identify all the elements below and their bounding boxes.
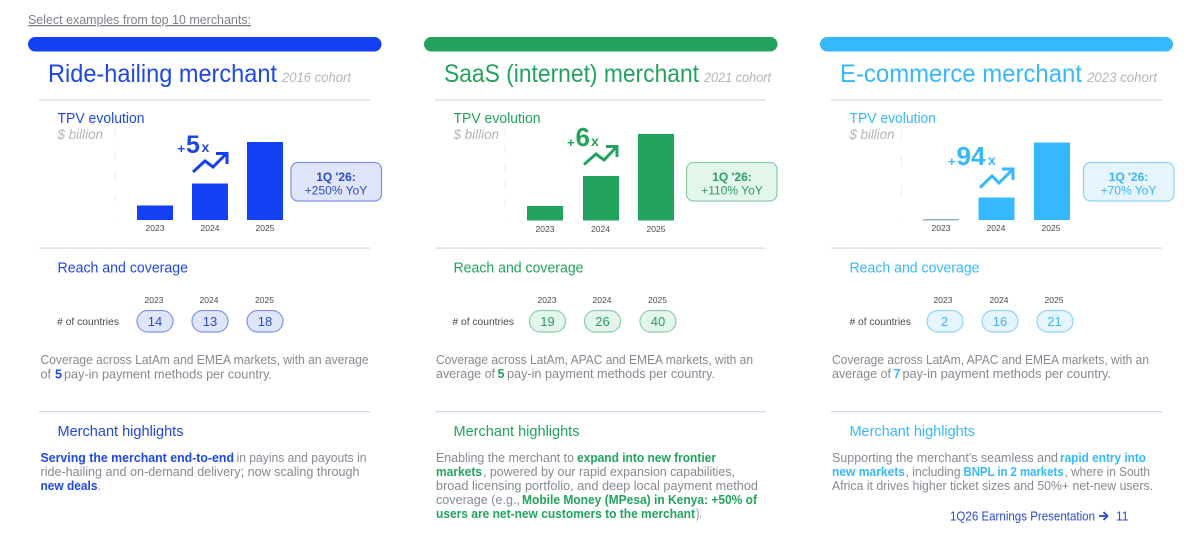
callout: 1Q 26 growth	[291, 162, 382, 201]
growth multiple: +94x: 94	[956, 141, 986, 171]
text: coverage description	[832, 353, 1149, 381]
text: coverage description: 5	[498, 367, 504, 381]
callout: 1Q 26 growth: 1Q '26:	[712, 170, 752, 184]
text: highlights: , where in South	[1064, 465, 1150, 479]
panel: e-commerce merchant	[820, 37, 1174, 493]
text: highlights: broad licensing portfolio, and deep local payment method	[436, 479, 758, 493]
heading: TPV evolution: TPV evolution	[454, 111, 540, 127]
bar chart: TPV	[900, 129, 1070, 233]
panel title: Ride-hailing merchant	[48, 60, 277, 88]
heading: reach and coverage: Reach and coverage	[850, 260, 980, 276]
table: number of countries: 2024	[593, 295, 612, 305]
growth multiple: +5x: 5	[186, 131, 200, 159]
table: number of countries: 21	[1047, 314, 1062, 329]
callout: 1Q 26 growth	[686, 162, 777, 201]
callout: 1Q 26 growth: 1Q '26:	[1109, 170, 1148, 184]
panel title: 2016 cohort	[281, 69, 352, 85]
heading: reach and coverage: Reach and coverage	[58, 260, 188, 276]
growth multiple: +94x: +	[948, 154, 956, 169]
table: number of countries: # of countries	[57, 316, 119, 328]
table: number of countries: 2025	[648, 295, 667, 305]
growth multiple: +94x: x	[988, 152, 996, 168]
text: highlights: Mobile Money (MPesa) in Kenya: +50% of	[522, 493, 758, 507]
text: highlights: Supporting the merchant's seamless and	[832, 451, 1058, 465]
panel title: 2023 cohort	[1086, 69, 1158, 85]
text: highlights: ).	[696, 507, 702, 521]
text: coverage description: average of	[436, 367, 496, 381]
table: number of countries: 16	[993, 314, 1007, 329]
table: number of countries: 13	[203, 314, 217, 329]
callout: 1Q 26 growth: +110% YoY	[701, 184, 763, 198]
icon: trend arrow	[980, 169, 1013, 188]
table: number of countries	[452, 295, 676, 332]
growth multiple: +6x: 6	[576, 122, 590, 152]
bar chart: TPV: 2024	[591, 224, 610, 234]
callout: 1Q 26 growth: +70% YoY	[1101, 184, 1156, 198]
table: number of countries: # of countries	[850, 316, 911, 328]
bar chart: TPV: 2024	[987, 223, 1006, 233]
text: highlights: in payins and payouts in	[236, 451, 367, 465]
heading: TPV evolution: $ billion	[453, 126, 499, 142]
growth multiple: +5x: +	[178, 141, 186, 156]
text: highlights: coverage (e.g.,	[436, 493, 520, 507]
table: number of countries: 2023	[145, 295, 164, 305]
text: coverage description: 5	[55, 368, 62, 382]
table: number of countries	[57, 295, 283, 332]
heading: merchant highlights: Merchant highlights	[454, 424, 580, 440]
text: coverage description: pay-in payment methods per country.	[64, 368, 272, 382]
text: coverage description: Coverage across LatAm, APAC and EMEA markets, with an	[436, 353, 753, 367]
panel title: 2021 cohort	[703, 69, 772, 85]
text: coverage description: pay-in payment methods per country.	[902, 367, 1111, 381]
heading: merchant highlights: Merchant highlights	[58, 424, 184, 440]
growth multiple: +6x: +	[567, 135, 575, 150]
heading: TPV evolution: $ billion	[57, 126, 103, 142]
heading: TPV evolution: TPV evolution	[850, 111, 936, 127]
heading: select examples: Select examples from top 10 merchants:	[28, 12, 251, 27]
heading: TPV evolution: TPV evolution	[58, 111, 144, 127]
bar chart: TPV: 2023	[932, 223, 951, 233]
growth multiple: +5x: x	[202, 139, 210, 155]
bar chart: TPV: 2025	[256, 223, 275, 233]
table: number of countries: 14	[148, 314, 162, 329]
heading: TPV evolution	[453, 111, 540, 142]
heading: TPV evolution: $ billion	[849, 126, 895, 142]
panel: SaaS merchant	[424, 37, 778, 521]
text: coverage description: pay-in payment methods per country.	[507, 367, 715, 381]
bar chart: TPV: 2024	[201, 223, 220, 233]
text: highlights	[832, 451, 1153, 493]
accent bar	[28, 37, 382, 52]
bar chart: TPV: 2025	[1042, 223, 1061, 233]
panel title: SaaS (internet) merchant	[444, 60, 699, 88]
panel title: E-commerce merchant	[840, 60, 1082, 88]
text: highlights: .	[98, 479, 101, 493]
accent bar	[820, 37, 1173, 52]
text: coverage description: average of	[832, 367, 892, 381]
text: highlights: markets	[436, 465, 482, 479]
footer: source and page number: 11	[1116, 508, 1128, 524]
heading: TPV evolution	[849, 111, 936, 142]
text: coverage description: Coverage across LatAm and EMEA markets, with an average	[40, 353, 369, 367]
heading: TPV evolution	[57, 111, 144, 142]
text: highlights	[436, 451, 758, 521]
text: highlights: , including	[906, 465, 961, 479]
bar chart: TPV: 2025	[647, 224, 666, 234]
bar chart: TPV	[504, 129, 674, 234]
heading: merchant highlights: Merchant highlights	[850, 424, 975, 440]
text: coverage description	[436, 353, 753, 381]
accent bar	[424, 37, 778, 52]
table: number of countries	[850, 295, 1073, 332]
panel: ride-hailing merchant	[28, 37, 382, 493]
text: highlights: , powered by our rapid expansion capabilities,	[483, 465, 735, 479]
table: number of countries: # of countries	[452, 316, 514, 328]
bar chart: TPV	[114, 129, 283, 233]
icon: trend arrow	[193, 154, 227, 172]
text: highlights: ride-hailing and on-demand delivery; now scaling through	[40, 465, 360, 479]
callout: 1Q 26 growth: +250% YoY	[305, 184, 367, 198]
text: highlights: rapid entry into	[1060, 451, 1146, 465]
table: number of countries: 40	[651, 314, 665, 329]
bar chart: TPV: 2023	[146, 223, 165, 233]
table: number of countries: 2025	[1045, 295, 1064, 305]
heading: reach and coverage: Reach and coverage	[454, 260, 584, 276]
callout: 1Q 26 growth: 1Q '26:	[316, 170, 356, 184]
table: number of countries: 26	[595, 314, 610, 329]
text: highlights: Africa it drives higher ticket sizes and 50%+ net-new users.	[832, 479, 1153, 493]
table: number of countries: 2023	[934, 295, 953, 305]
table: number of countries: 18	[258, 314, 272, 329]
bar chart: TPV: 2023	[536, 224, 555, 234]
table: number of countries: 2024	[990, 295, 1009, 305]
text: coverage description: of	[40, 368, 51, 382]
table: number of countries: 2023	[538, 295, 557, 305]
table: number of countries: 2024	[200, 295, 219, 305]
text: highlights: users are net-new customers to the merchant	[436, 507, 696, 521]
text: highlights: Enabling the merchant to	[436, 451, 574, 465]
text: coverage description: Coverage across LatAm, APAC and EMEA markets, with an	[832, 353, 1149, 367]
icon: trend arrow	[584, 146, 617, 164]
text: highlights: new deals	[40, 479, 98, 493]
table: number of countries: 2025	[255, 295, 274, 305]
callout: 1Q 26 growth	[1084, 162, 1174, 201]
text: highlights: BNPL in 2 markets	[964, 465, 1064, 479]
text: highlights	[40, 451, 367, 493]
table: number of countries: 2	[941, 314, 948, 329]
text: coverage description	[40, 353, 369, 382]
table: number of countries: 19	[540, 314, 555, 329]
text: highlights: new markets	[832, 465, 905, 479]
growth multiple: +6x: x	[591, 133, 599, 149]
text: highlights: Serving the merchant end-to-end	[40, 451, 234, 465]
text: highlights: expand into new frontier	[577, 451, 716, 465]
text: coverage description: 7	[894, 367, 900, 381]
footer: source and page number: 1Q26 Earnings Presentation	[950, 510, 1095, 524]
